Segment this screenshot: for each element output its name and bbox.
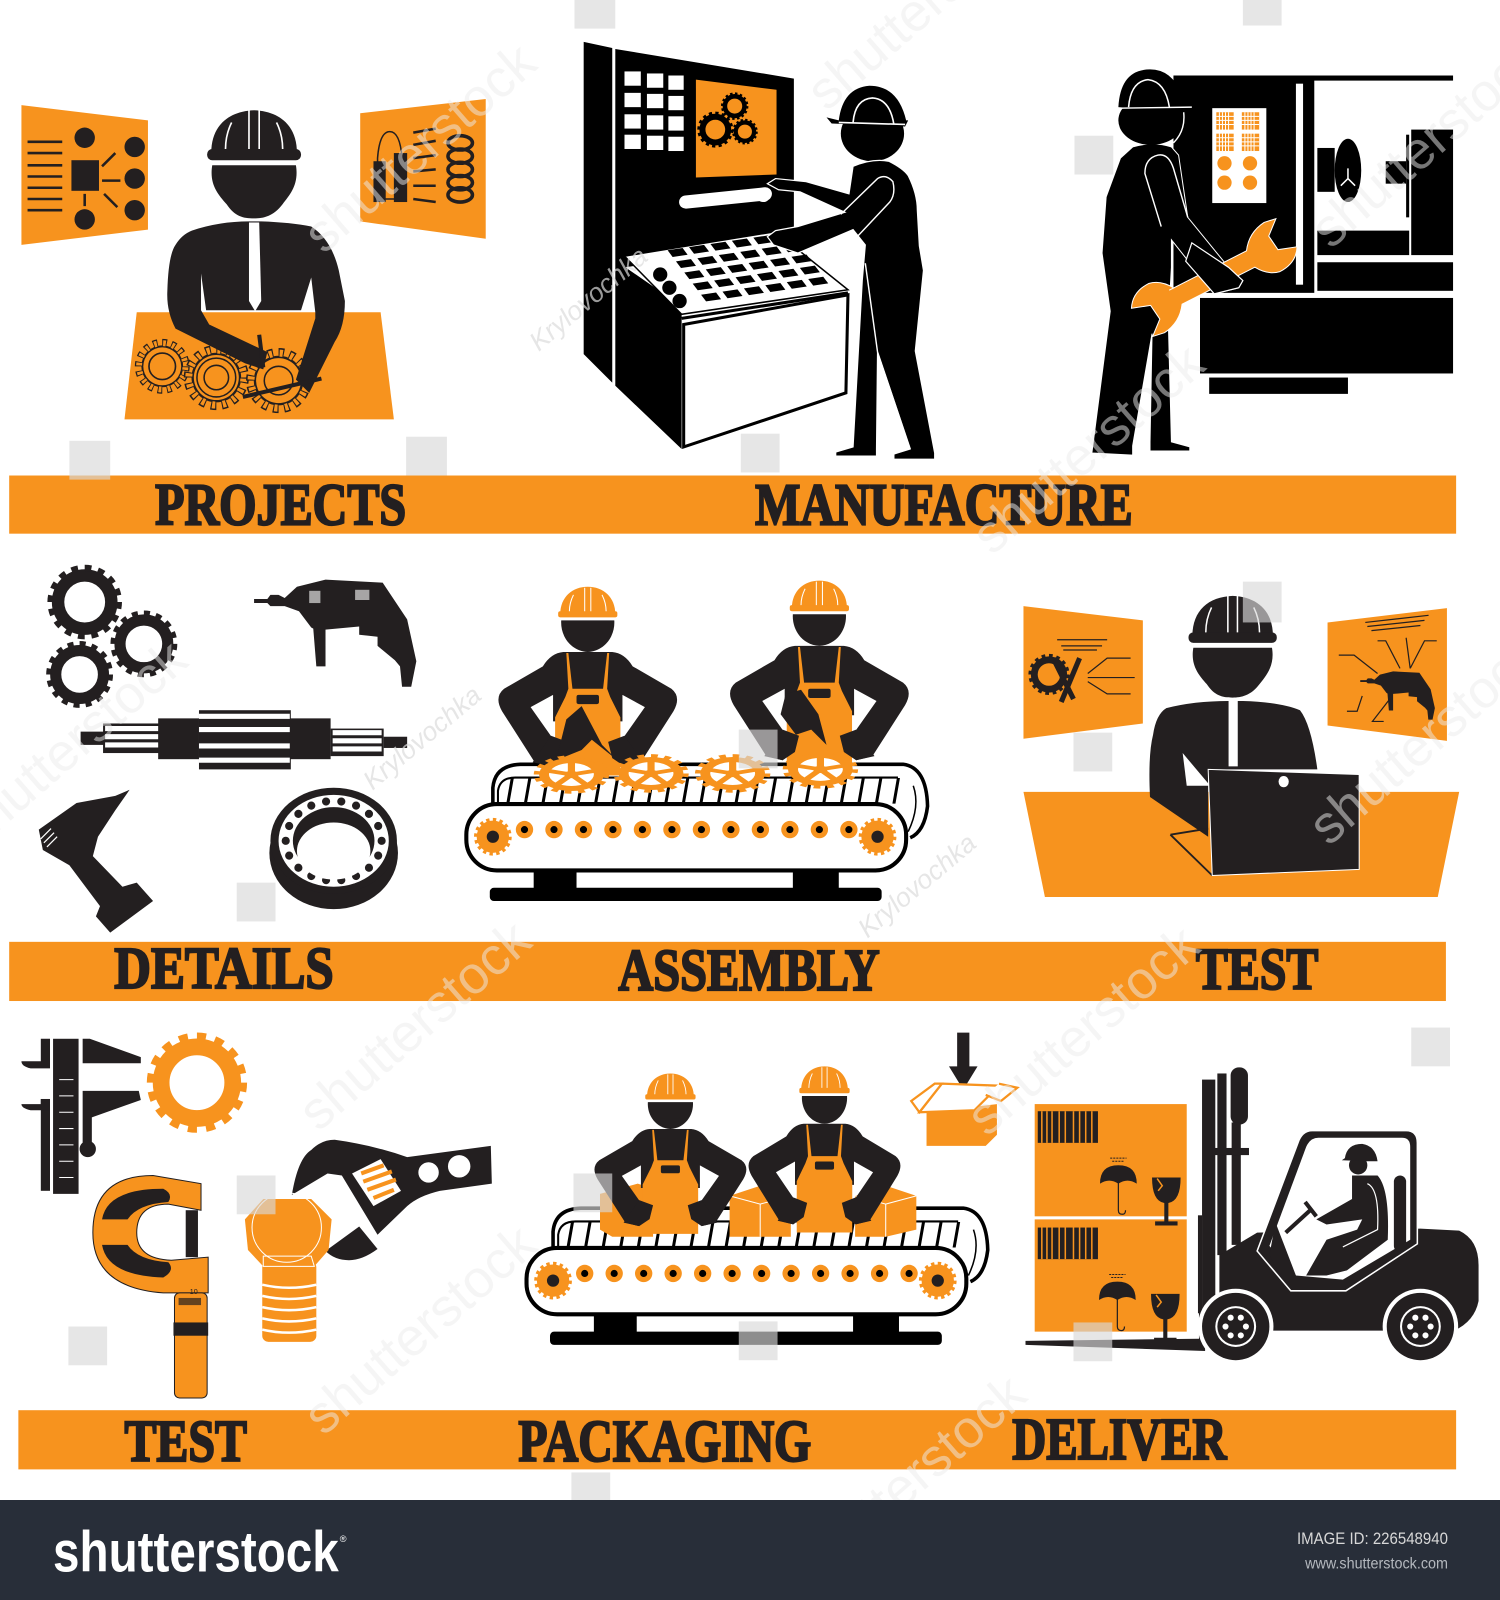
operator figure: [767, 86, 935, 459]
panel: projects: [21, 99, 486, 419]
heading: packaging: PACKAGING: [518, 1408, 811, 1474]
heading: assembly: ASSEMBLY: [618, 937, 880, 1003]
heading: projects: PROJECTS: [155, 471, 406, 537]
icon: micrometer: 10: [190, 1288, 198, 1296]
desk with gear drawing: [124, 312, 394, 419]
laptop: [1170, 769, 1359, 876]
image id: IMAGE ID: 226548940: [1297, 1530, 1448, 1548]
mechanic figure: [1092, 69, 1243, 455]
panel: manufacture control console: [584, 42, 935, 459]
footer logo: shutterstock: [53, 1520, 339, 1584]
panel: packaging line: [527, 1033, 1017, 1345]
icon: cordless drill: [39, 790, 153, 933]
drills held by workers: [556, 690, 827, 760]
panel: milling machine and mechanic: [1092, 69, 1453, 455]
watermark overlay: shutterstock: [956, 914, 1211, 1147]
worker left: [498, 587, 677, 776]
orange band: row three: [18, 1406, 1456, 1474]
watermark overlay: shutterstock: [288, 909, 542, 1142]
icon: orange gear: [151, 1037, 243, 1129]
icon: orange bolt: [245, 1193, 332, 1342]
watermark overlay: Krylovochka: [852, 828, 982, 943]
worker left: [594, 1073, 746, 1234]
left tool screen: [1023, 606, 1143, 739]
website: www.shutterstock.com: [1304, 1555, 1448, 1572]
heading: test: TEST: [124, 1408, 247, 1474]
forklift: [1026, 1067, 1479, 1364]
icon: three gears: [49, 568, 175, 705]
right tool screen: [1328, 608, 1447, 741]
stacked cartons: [1035, 1104, 1187, 1342]
gears on belt: [537, 752, 855, 792]
watermark overlay: shutterstock: [961, 333, 1216, 565]
worker right: [749, 1066, 900, 1232]
panel: test with laptop: [1023, 596, 1459, 897]
keyboard desk: [624, 232, 848, 447]
icon: electric drill: [254, 580, 416, 687]
cardboard boxes on belt: [600, 1184, 916, 1237]
footer bar: [0, 1500, 1500, 1600]
heading: manufacture: MANUFACTURE: [755, 471, 1133, 537]
left blueprint screen: [21, 105, 148, 245]
icon: micrometer: [93, 1176, 208, 1398]
icon: ball bearing: [269, 788, 398, 909]
icon: down arrow into box: [949, 1033, 978, 1090]
panel: measuring tools: [21, 1037, 492, 1398]
icon: open box: [911, 1084, 1017, 1146]
watermark overlay: shutterstock: [293, 1213, 548, 1446]
registered mark: ®: [340, 1534, 347, 1544]
panel: deliver forklift: [1026, 1067, 1479, 1364]
worker right: [730, 581, 909, 769]
panel: details: [39, 568, 416, 933]
conveyor belt: [527, 1208, 988, 1345]
orange band: row two: [9, 935, 1446, 1003]
right blueprint screen: [360, 99, 486, 239]
icon: adjustable wrench: [292, 1140, 492, 1260]
engineer figure: [1149, 596, 1317, 837]
engineer figure: [167, 110, 345, 397]
watermark overlay: shutterstock: [293, 32, 548, 264]
milling machine: [1173, 76, 1453, 394]
watermark overlay: Krylovochka: [523, 241, 653, 357]
watermark overlay: Krylovochka: [357, 680, 487, 795]
heading: test: TEST: [1196, 936, 1318, 1002]
conveyor belt: [466, 764, 928, 901]
icon: splined shaft: [81, 710, 407, 769]
control cabinet: [584, 42, 794, 449]
heading: details: DETAILS: [114, 935, 334, 1001]
watermark overlay: shutterstock: [782, 1363, 1037, 1596]
desk: [1023, 792, 1459, 897]
icon: caliper: [21, 1039, 141, 1194]
panel: assembly line: [466, 581, 928, 901]
heading: deliver: DELIVER: [1012, 1406, 1228, 1472]
orange band: row one: [9, 471, 1456, 537]
icon: orange wrench: [1124, 214, 1305, 341]
